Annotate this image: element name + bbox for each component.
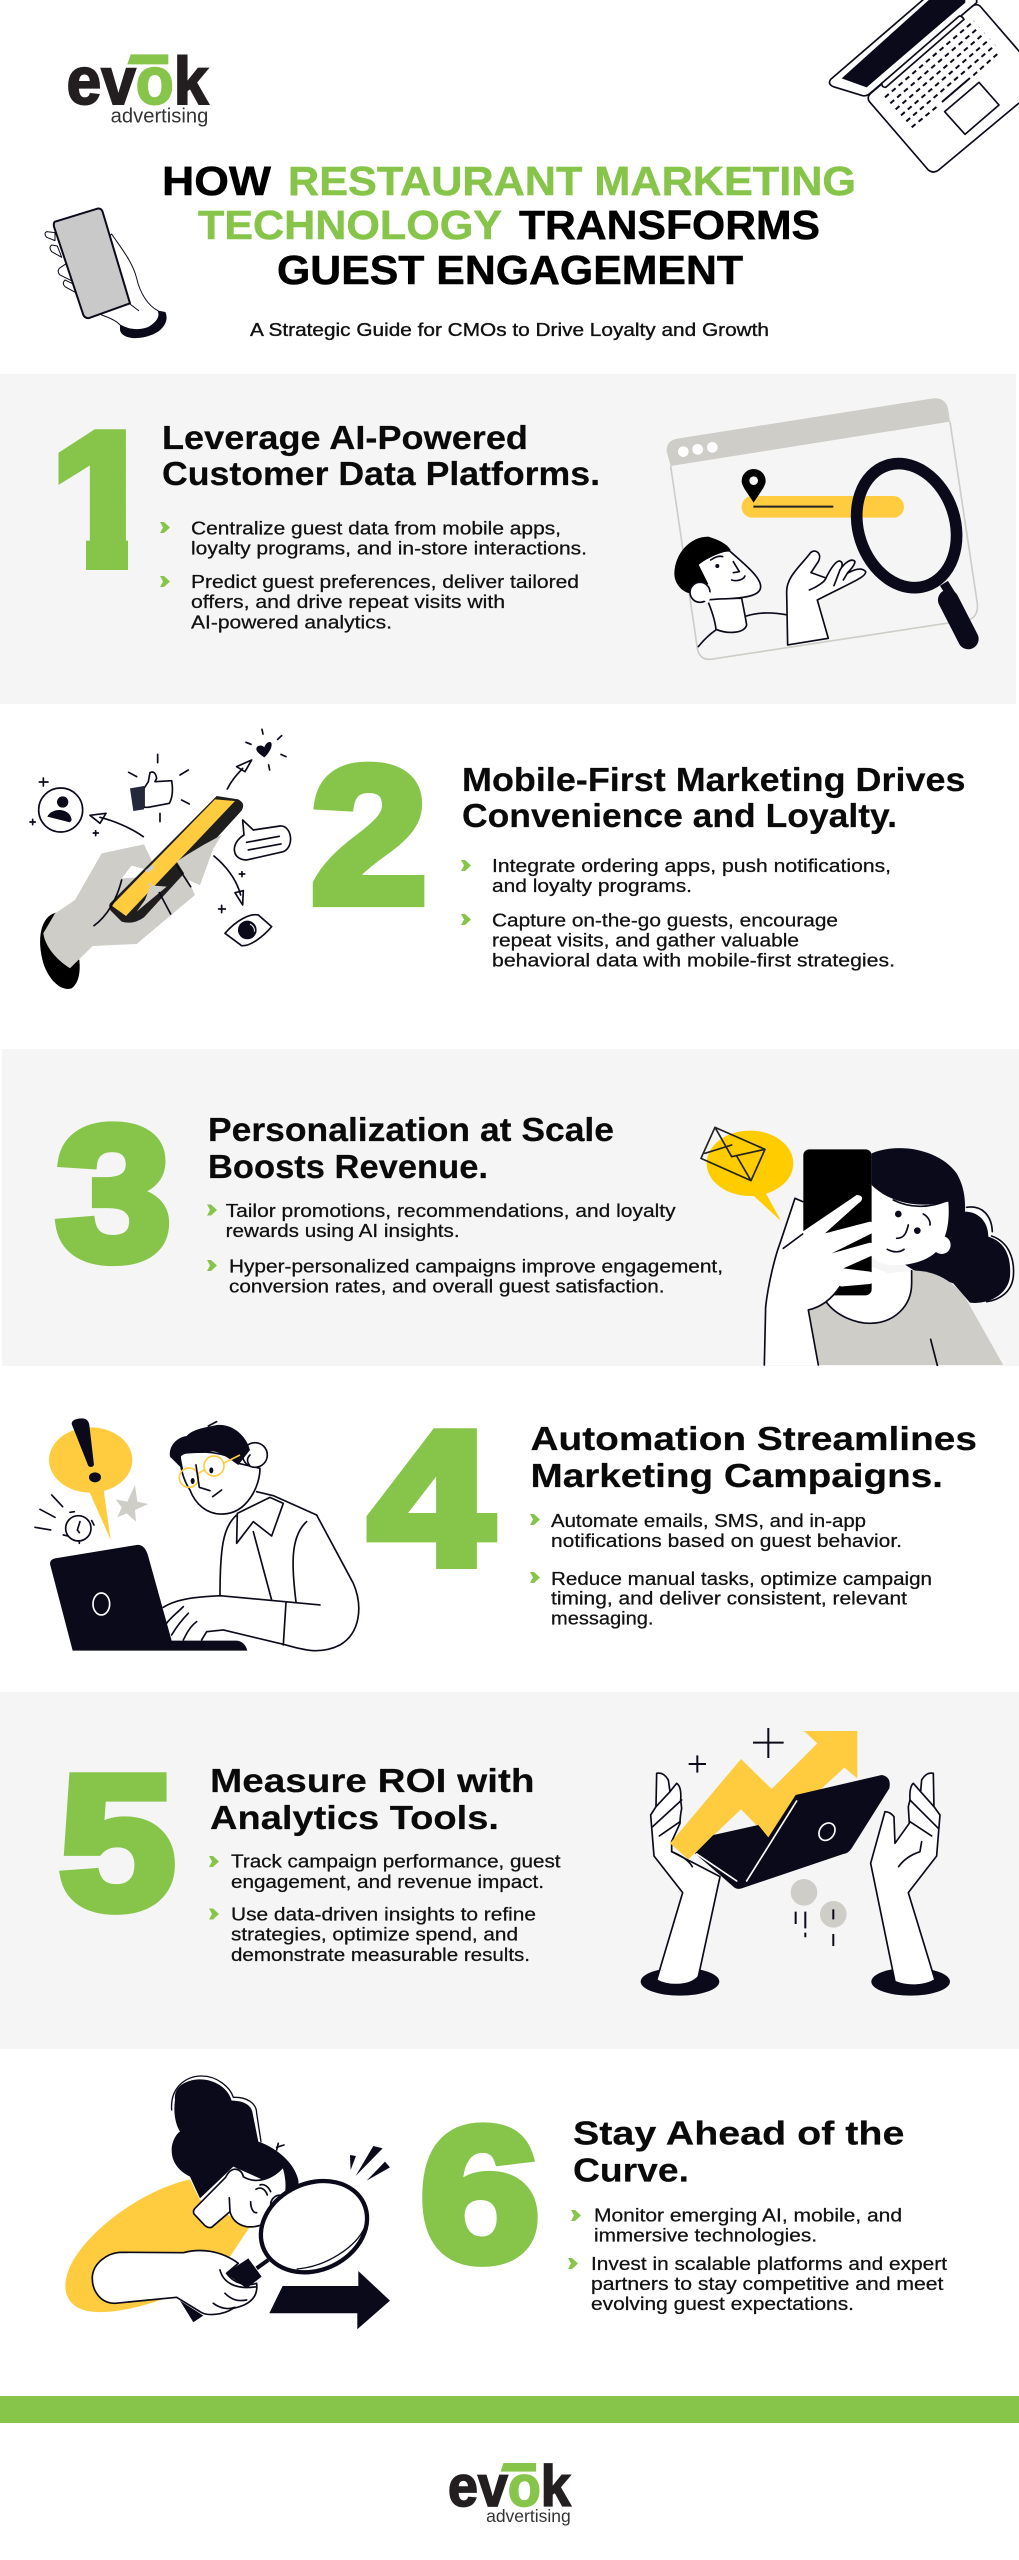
illustration: woman with phone and email bubble — [701, 1127, 1014, 1367]
icon: eye — [225, 915, 272, 946]
heading 3: Personalization at Scale — [208, 1111, 614, 1148]
heading 1: Customer Data Platforms. — [162, 455, 600, 492]
number 3: 3 — [56, 1088, 171, 1300]
illustration: man at laptop with alert — [35, 1418, 359, 1651]
arrow to user — [90, 813, 143, 837]
heading: main title — [162, 158, 856, 293]
bullet 3.1 — [207, 1201, 676, 1241]
bullet 4.2: messaging. — [551, 1608, 654, 1628]
heading 3 — [208, 1111, 614, 1185]
icon: heart — [246, 729, 286, 770]
panel: step 4 — [0, 1366, 1019, 1692]
icon: thumbs up — [129, 754, 189, 822]
bullet 6.2 — [568, 2254, 947, 2314]
panel: step 5 — [0, 1692, 1019, 2049]
bullet 2.2: behavioral data with mobile-first strategies. — [492, 950, 895, 970]
bullet 5.2: demonstrate measurable results. — [231, 1945, 530, 1965]
heading 5: Analytics Tools. — [210, 1799, 499, 1836]
heading 5: Measure ROI with — [210, 1762, 534, 1799]
heading 6: Stay Ahead of the — [573, 2114, 904, 2152]
green footer band — [0, 2396, 1019, 2423]
heading 5 — [210, 1762, 534, 1836]
heading 4: Marketing Campaigns. — [530, 1457, 943, 1494]
bullet 1.1 — [160, 518, 587, 558]
bullet 5.1 — [209, 1852, 560, 1892]
heading 1 — [162, 419, 600, 492]
bullet 4.1 — [530, 1511, 902, 1551]
bullet 4.1: Automate emails, SMS, and in-app — [551, 1511, 866, 1531]
illustration: hands, laptop and growth arrow — [641, 1728, 950, 1996]
bullet 5.1: engagement, and revenue impact. — [231, 1872, 544, 1892]
bullet 1.2: AI-powered analytics. — [191, 612, 392, 632]
heading 1: Leverage AI-Powered — [162, 419, 528, 456]
heading 3: Boosts Revenue. — [208, 1148, 488, 1185]
bullet 6.2: partners to stay competitive and meet — [591, 2274, 943, 2294]
bullet 4.2: timing, and deliver consistent, relevant — [551, 1588, 907, 1608]
illustration: woman with magnifying glass and arrow — [65, 2076, 390, 2329]
bullet 1.2: offers, and drive repeat visits with — [191, 592, 505, 612]
header logo: evok — [67, 45, 209, 119]
subtitle: A Strategic Guide for CMOs to Drive Loyalty and Growth — [250, 320, 769, 340]
arrow down — [214, 856, 245, 913]
illustration: browser window, man and magnifier — [667, 398, 977, 659]
number 1: 1 — [50, 394, 156, 606]
bullet 6.2: evolving guest expectations. — [591, 2294, 854, 2314]
bullet 6.1 — [571, 2206, 902, 2246]
bullet 1.2 — [160, 572, 579, 632]
heading 2 — [462, 761, 966, 834]
panel: step 1 — [0, 374, 1016, 704]
bullet 1.1: loyalty programs, and in-store interactions. — [191, 538, 587, 558]
number 6: 6 — [420, 2089, 540, 2301]
bullet 5.2: Use data-driven insights to refine — [231, 1904, 536, 1924]
heading 4 — [530, 1420, 977, 1494]
bullet 4.2: Reduce manual tasks, optimize campaign — [551, 1569, 932, 1589]
arrow up — [227, 760, 252, 789]
bullet 3.2 — [207, 1256, 723, 1296]
bullet 3.2: Hyper-personalized campaigns improve engagement, — [229, 1256, 723, 1276]
bullet 1.1: Centralize guest data from mobile apps, — [191, 518, 561, 538]
heading: main title: TECHNOLOGY — [198, 202, 502, 248]
illustration: hand with phone and social icons — [30, 729, 291, 989]
bullet 4.1: notifications based on guest behavior. — [551, 1531, 902, 1551]
number 4: 4 — [369, 1392, 493, 1604]
heading: main title: HOW — [162, 158, 271, 204]
icon: user profile — [30, 778, 98, 836]
number 5: 5 — [59, 1737, 175, 1949]
footer logo: evok — [448, 2455, 572, 2519]
heading 4: Automation Streamlines — [530, 1420, 977, 1457]
bullet 3.2: conversion rates, and overall guest satisfaction. — [229, 1276, 664, 1296]
number 2: 2 — [311, 727, 427, 943]
bullet 2.2 — [461, 910, 895, 970]
heading 2: Convenience and Loyalty. — [462, 797, 897, 834]
icon: laptop top right — [829, 0, 1019, 172]
bullet 6.2: Invest in scalable platforms and expert — [591, 2254, 947, 2274]
header logo: advertising — [111, 105, 208, 128]
bullet 3.1: Tailor promotions, recommendations, and loyalty — [226, 1201, 676, 1221]
heading: main title: RESTAURANT MARKETING — [288, 158, 856, 204]
bullet 6.1: Monitor emerging AI, mobile, and — [594, 2206, 902, 2226]
heading 6 — [573, 2114, 904, 2188]
bullet 2.1 — [461, 856, 891, 896]
bullet 1.2: Predict guest preferences, deliver tailored — [191, 572, 579, 592]
bullet 2.1: Integrate ordering apps, push notifications, — [492, 856, 891, 876]
bullet 2.1: and loyalty programs. — [492, 876, 692, 896]
bullet 2.2: Capture on-the-go guests, encourage — [492, 910, 838, 930]
heading: main title: TRANSFORMS — [519, 202, 820, 248]
bullet 5.2: strategies, optimize spend, and — [231, 1924, 518, 1944]
bullet 3.1: rewards using AI insights. — [226, 1221, 460, 1241]
heading 6: Curve. — [573, 2152, 689, 2188]
icon: speech bubble — [234, 820, 291, 860]
panel: step 6 — [0, 2049, 1019, 2396]
bullet 4.2 — [530, 1569, 932, 1628]
footer logo: advertising — [486, 2506, 571, 2526]
panel: step 2 — [0, 704, 1019, 1049]
panel: step 3 — [2, 1049, 1019, 1367]
bullet 6.1: immersive technologies. — [594, 2226, 817, 2246]
bullet 2.2: repeat visits, and gather valuable — [492, 930, 799, 950]
bullet 5.1: Track campaign performance, guest — [231, 1852, 560, 1872]
icon: hand holding phone — [45, 209, 167, 338]
heading: main title: GUEST ENGAGEMENT — [277, 247, 743, 293]
heading 2: Mobile-First Marketing Drives — [462, 761, 966, 798]
bullet 5.2 — [209, 1904, 536, 1965]
